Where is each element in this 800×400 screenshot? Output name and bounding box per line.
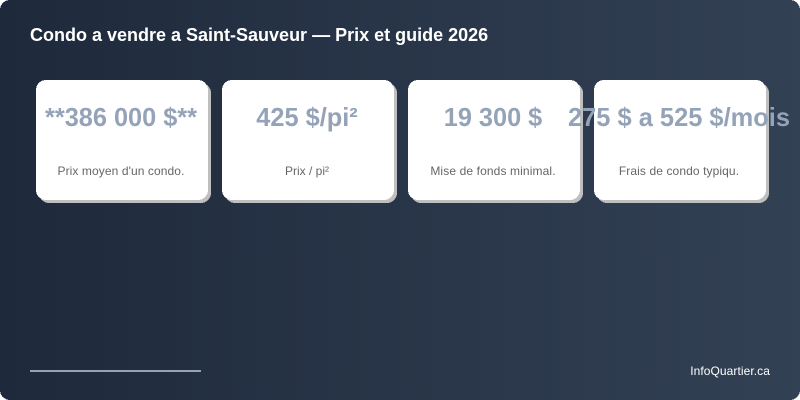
value: frais de condo: 275 $ a 525 $/mois bbox=[568, 102, 790, 132]
card: mise de fonds bbox=[408, 80, 583, 203]
value: mise de fonds: 19 300 $ bbox=[444, 102, 543, 132]
value: prix moyen: **386 000 $** bbox=[45, 102, 198, 132]
title: Condo a vendre a Saint-Sauveur — Prix et guide 2026 bbox=[30, 25, 488, 45]
card: prix par pied carre bbox=[222, 80, 397, 203]
description: mise de fonds: Mise de fonds minimal. bbox=[430, 164, 556, 178]
value: prix par pied carre: 425 $/pi² bbox=[256, 102, 358, 132]
card: prix moyen bbox=[36, 80, 211, 203]
description: frais de condo: Frais de condo typiqu. bbox=[619, 164, 739, 178]
accent line bbox=[30, 370, 201, 372]
card: frais de condo bbox=[568, 80, 790, 203]
source label: InfoQuartier.ca bbox=[690, 364, 770, 378]
description: prix par pied carre: Prix / pi² bbox=[285, 164, 329, 178]
description: prix moyen: Prix moyen d'un condo. bbox=[57, 164, 185, 178]
